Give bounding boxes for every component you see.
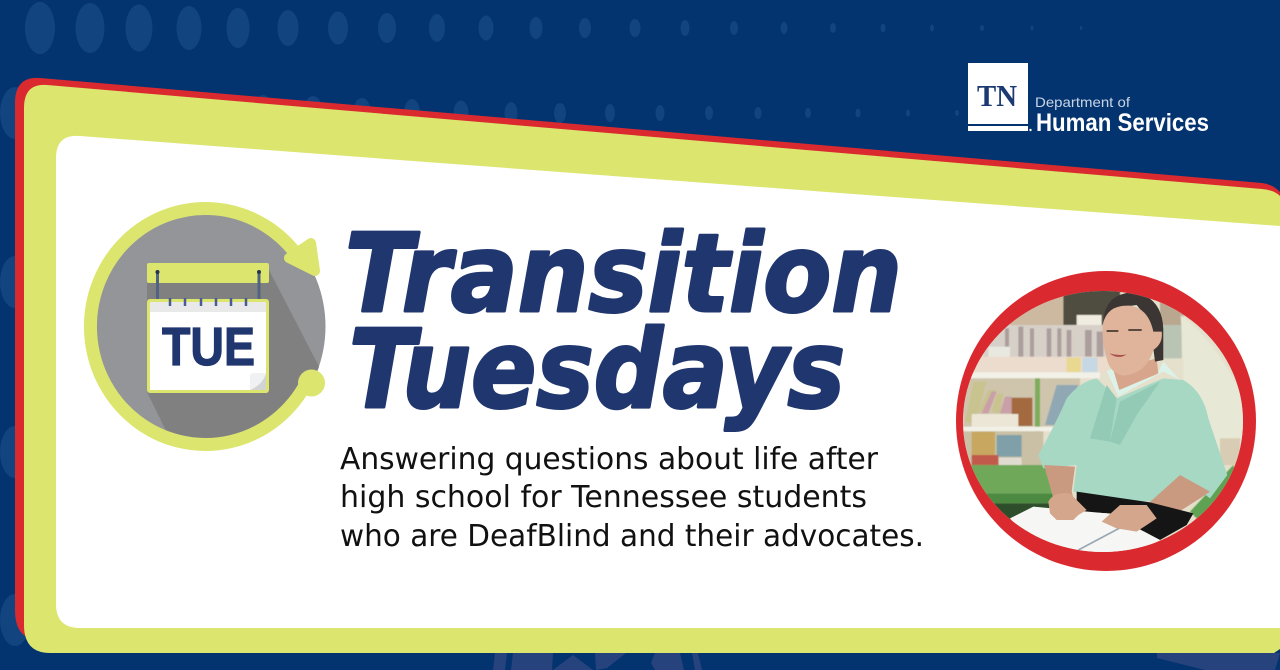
- calendar page: [148, 300, 268, 392]
- subtitle text: high school for Tennessee students: [340, 480, 867, 515]
- arrow head: [289, 243, 315, 271]
- faint state seal at bottom: [493, 653, 1280, 670]
- white content panel: [56, 136, 1280, 628]
- title: Transition Tuesdays: Transition: [345, 212, 902, 337]
- white wall: [1181, 315, 1243, 465]
- hanging cords: [158, 272, 259, 300]
- TN Department of Human Services logo: Human Services: [1036, 109, 1209, 137]
- icon: recurring Tuesday calendar: [84, 202, 326, 451]
- lower shelf: [970, 372, 1100, 378]
- subtitle text: who are DeafBlind and their advocates.: [340, 519, 924, 554]
- upper shelves: [1010, 296, 1064, 326]
- calendar shadow: [147, 270, 319, 438]
- hair: [1103, 292, 1163, 362]
- calendar hanging bar: [147, 263, 269, 283]
- TN Department of Human Services logo: Department of: [1035, 94, 1130, 110]
- binding rings: [170, 298, 246, 306]
- skirt: [1077, 492, 1193, 540]
- day label: TUE: [162, 317, 255, 377]
- title: Transition Tuesdays: Tuesdays: [349, 308, 845, 433]
- braille book: [1010, 506, 1160, 552]
- arms: [1044, 465, 1075, 496]
- woman's shirt: [1038, 378, 1227, 502]
- title: Transition Tuesdays: [345, 212, 902, 433]
- neck: [1113, 358, 1158, 390]
- green tables: [970, 465, 1057, 493]
- face: [1102, 306, 1162, 376]
- subtitle text: Answering questions about life after: [340, 442, 879, 477]
- arrow tail dot: [298, 370, 325, 396]
- circular arrow ring: [90, 208, 307, 444]
- TN Department of Human Services logo: TN: [977, 78, 1017, 113]
- hands: [1048, 493, 1087, 520]
- photo: woman reading braille in a library: [963, 291, 1243, 552]
- TN Department of Human Services logo: [968, 63, 1209, 137]
- subtitle text: [340, 442, 924, 554]
- red photo ring: [956, 271, 1256, 571]
- page curl: [250, 373, 266, 390]
- grey disc: [86, 204, 326, 450]
- collar: [1107, 362, 1180, 397]
